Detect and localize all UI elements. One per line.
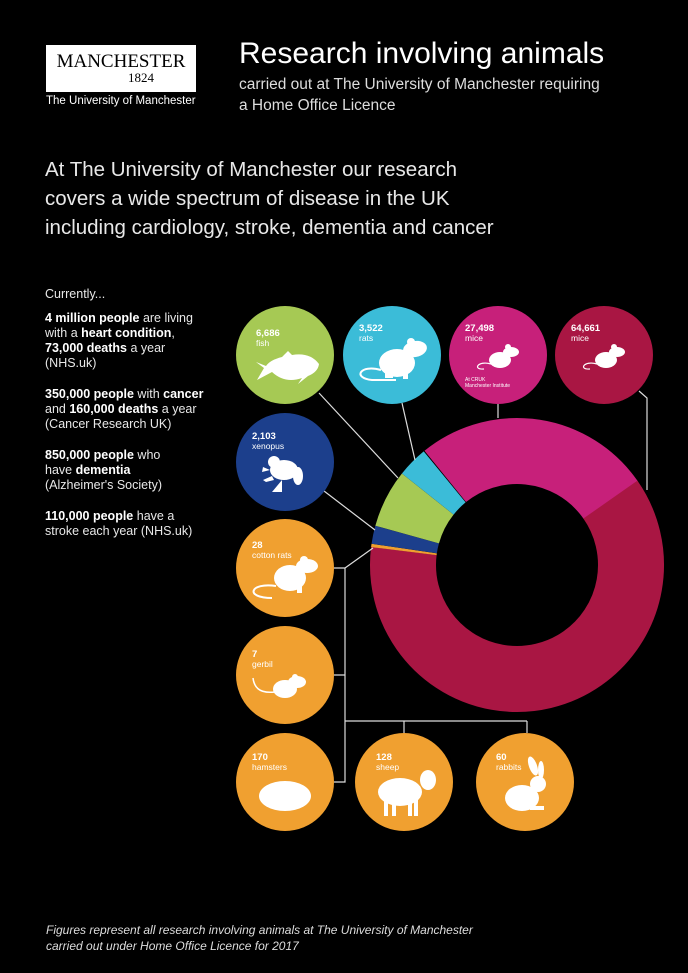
circle: mice CRUK: 27,498: [465, 323, 494, 334]
connector lines: [319, 391, 647, 782]
circle: gerbil: 7: [252, 649, 257, 660]
circle: sheep: sheep: [376, 762, 399, 772]
footer note: carried out under Home Office Licence for 2017: [46, 939, 299, 953]
circle: hamsters: hamsters: [252, 762, 287, 772]
circle: xenopus: [236, 413, 334, 511]
circle: rabbits: [476, 733, 574, 831]
intro text: [45, 158, 494, 239]
circle: fish: fish: [256, 338, 270, 348]
circle: hamsters: 170: [252, 752, 268, 763]
text block: statistics: (Alzheimer's Society): [45, 478, 162, 492]
donut chart: [357, 405, 677, 725]
circle: xenopus: xenopus: [252, 441, 284, 451]
circle: mice CRUK: At CRUK: [465, 377, 486, 383]
circle: mice CRUK: mice: [465, 333, 483, 343]
circle: gerbil: [236, 626, 334, 724]
intro text: covers a wide spectrum of disease in the UK: [45, 187, 450, 210]
footer note: Figures represent all research involving animals at The University of Manchester: [46, 923, 473, 937]
text block: statistics: with a heart condition,: [45, 326, 175, 340]
intro text: At The University of Manchester our research: [45, 158, 457, 181]
circle: sheep: 128: [376, 752, 392, 763]
circle: fish: 6,686: [256, 328, 280, 339]
logo: The University of Manchester: [46, 95, 196, 107]
text block: statistics: stroke each year (NHS.uk): [45, 524, 192, 538]
text block: statistics: 4 million people are living: [45, 311, 193, 325]
circle: rats: 3,522: [359, 323, 383, 334]
intro text: including cardiology, stroke, dementia and cancer: [45, 216, 494, 239]
title: Research involving animals: [239, 37, 604, 70]
circle: rats: [343, 306, 441, 404]
circle: hamsters: [236, 733, 334, 831]
subtitle: [239, 76, 600, 114]
circle: mice CRUK: Manchester Institute: [465, 383, 510, 389]
circle: gerbil: gerbil: [252, 659, 273, 669]
footer note: [46, 923, 474, 953]
circle: rats: rats: [359, 333, 373, 343]
circle: mice: 64,661: [571, 323, 601, 334]
logo: MANCHESTER: [57, 51, 185, 72]
text block: statistics: (Cancer Research UK): [45, 417, 171, 431]
text block: statistics: 850,000 people who: [45, 448, 160, 462]
subtitle: a Home Office Licence: [239, 97, 396, 114]
subtitle: carried out at The University of Manchester requiring: [239, 76, 600, 93]
text block: statistics: have dementia: [45, 463, 130, 477]
circle: cotton rats: 28: [252, 540, 263, 551]
circle: rabbits: rabbits: [496, 762, 522, 772]
circle: sheep: [355, 733, 453, 831]
logo: 1824: [128, 70, 154, 85]
circle: fish: [236, 306, 334, 404]
text block: statistics: 73,000 deaths a year: [45, 341, 165, 355]
circle: rabbits: 60: [496, 752, 507, 763]
logo: [46, 45, 196, 107]
circle: xenopus: 2,103: [252, 431, 276, 442]
circle: mice: [555, 306, 653, 404]
text block: statistics: Currently...: [45, 287, 105, 301]
text block: statistics: 110,000 people have a: [45, 509, 174, 523]
text block: statistics: and 160,000 deaths a year: [45, 402, 197, 416]
circle: cotton rats: [236, 519, 334, 617]
circle: mice CRUK: [449, 306, 547, 404]
text block: statistics: 350,000 people with cancer: [45, 387, 203, 401]
text block: statistics: [45, 287, 204, 538]
circle: cotton rats: cotton rats: [252, 550, 292, 560]
text block: statistics: (NHS.uk): [45, 356, 96, 370]
circle: mice: mice: [571, 333, 589, 343]
